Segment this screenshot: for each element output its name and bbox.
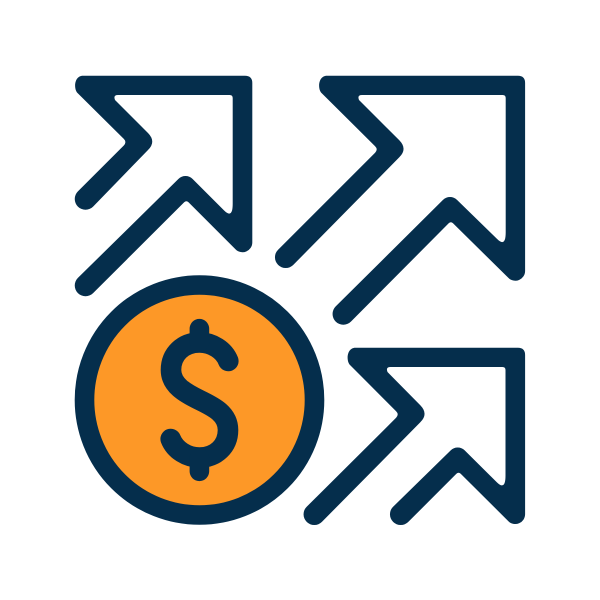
icon: top-left arrow xyxy=(75,76,252,296)
coin disc xyxy=(84,285,314,515)
dollar sign xyxy=(171,329,228,471)
icon: top-right arrow xyxy=(275,76,525,325)
icon: dollar coin xyxy=(84,285,314,515)
icon: bottom-right arrow xyxy=(304,348,525,525)
